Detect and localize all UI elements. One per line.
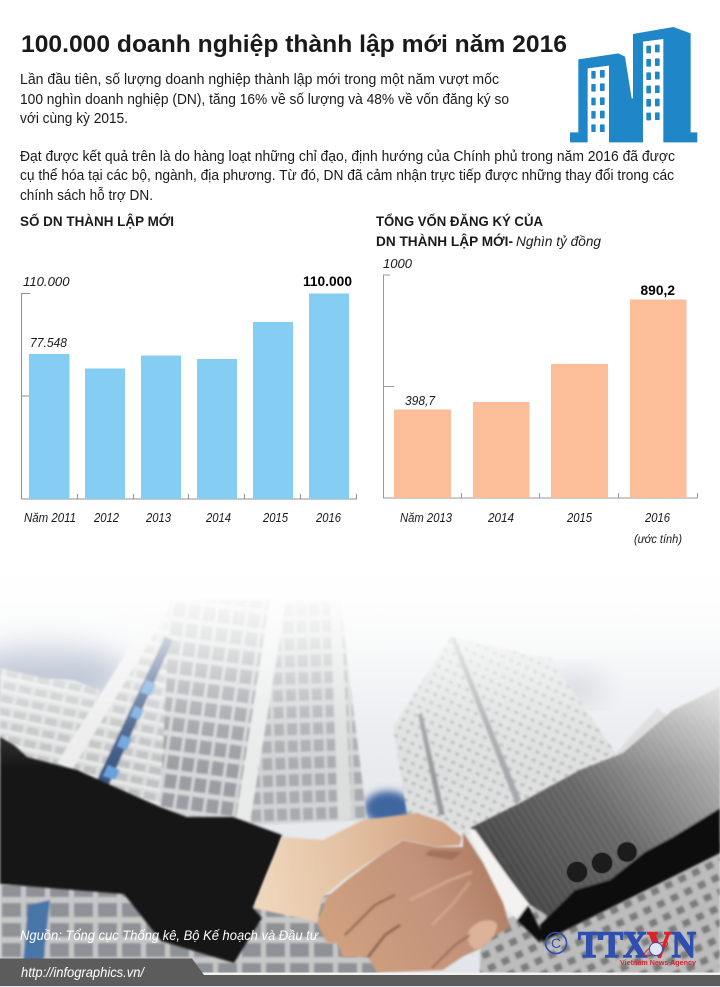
second paragraph: Đạt được kết quả trên là do hàng loạt những chỉ đạo, định hướng của Chính phủ trong năm 2016 đã được	[20, 148, 675, 165]
heading: total registered capital: Nghìn tỷ đồng	[516, 233, 601, 249]
bar chart: new enterprises: 2012	[93, 510, 120, 525]
intro paragraph: Lần đầu tiên, số lượng doanh nghiệp thành lập mới trong một năm vượt mốc	[20, 71, 499, 88]
website url: http://infographics.vn/	[21, 964, 146, 980]
bar chart: new enterprises: 110.000	[303, 274, 352, 289]
intro paragraph: 100 nghìn doanh nghiệp (DN), tăng 16% về số lượng và 48% về vốn đăng ký so	[20, 91, 509, 108]
bar chart: registered capital: Năm 2013	[400, 510, 453, 525]
bar chart: new enterprises: Năm 2011	[24, 510, 76, 525]
bar chart: registered capital: 398,7	[405, 393, 436, 408]
icon: office buildings	[570, 27, 697, 142]
sleeve pinstripes	[470, 687, 720, 915]
logo: TTXVN: C	[551, 935, 561, 951]
left hand	[253, 813, 462, 922]
bar chart: new enterprises	[22, 274, 357, 525]
second paragraph	[20, 148, 675, 204]
bar chart: registered capital: 2015	[566, 510, 593, 525]
bar chart: new enterprises: 2013	[145, 510, 172, 525]
bar chart: registered capital	[383, 256, 698, 546]
footer bar	[0, 958, 720, 986]
intro paragraph: với cùng kỳ 2015.	[20, 110, 128, 127]
logo: TTXVN: Vietnam News Agency	[620, 958, 697, 967]
heading: total registered capital: TỔNG VỐN ĐĂNG KÝ CỦA	[376, 212, 543, 229]
heading: total registered capital	[376, 212, 601, 249]
heading: number of new enterprises: SỐ DN THÀNH LẬP MỚI	[20, 212, 174, 229]
bar chart: new enterprises: 110.000	[23, 274, 70, 289]
finger shadows and veins	[345, 850, 472, 968]
sleeve shadow	[540, 808, 720, 942]
bar chart: new enterprises: 77.548	[30, 335, 68, 350]
bar chart: new enterprises: 2014	[205, 510, 231, 525]
bar chart: registered capital: (ước tính)	[634, 532, 682, 546]
logo: TTXVN: TTXVN	[578, 925, 696, 966]
white shirt cuff	[467, 828, 528, 920]
second paragraph: chính sách hỗ trợ DN.	[20, 187, 153, 204]
bar chart: new enterprises: 2015	[262, 510, 289, 525]
intro paragraph	[20, 71, 509, 127]
bar chart: registered capital: 890,2	[640, 283, 675, 298]
bar chart: new enterprises: 2016	[315, 510, 342, 525]
right hand	[317, 832, 510, 973]
source note: Nguồn: Tổng cục Thống kê, Bộ Kế hoạch và Đầu tư	[20, 927, 319, 943]
second paragraph: cụ thể hóa tại các bộ, ngành, địa phương. Từ đó, DN đã cảm nhận trực tiếp được những thay đổi trong các	[20, 167, 674, 184]
title: 100.000 doanh nghiệp thành lập mới năm 2016	[21, 31, 567, 58]
background photo: handshake and towers	[0, 550, 720, 987]
bar chart: registered capital: 1000	[383, 256, 413, 271]
bar chart: registered capital: 2016	[644, 510, 671, 525]
right grey sleeve	[470, 687, 720, 942]
heading: total registered capital: DN THÀNH LẬP MỚI-	[376, 232, 513, 249]
left dark sleeve	[0, 737, 282, 963]
jacket buttons	[566, 842, 637, 882]
bar chart: registered capital: 2014	[487, 510, 514, 525]
thumb tip	[468, 920, 497, 950]
